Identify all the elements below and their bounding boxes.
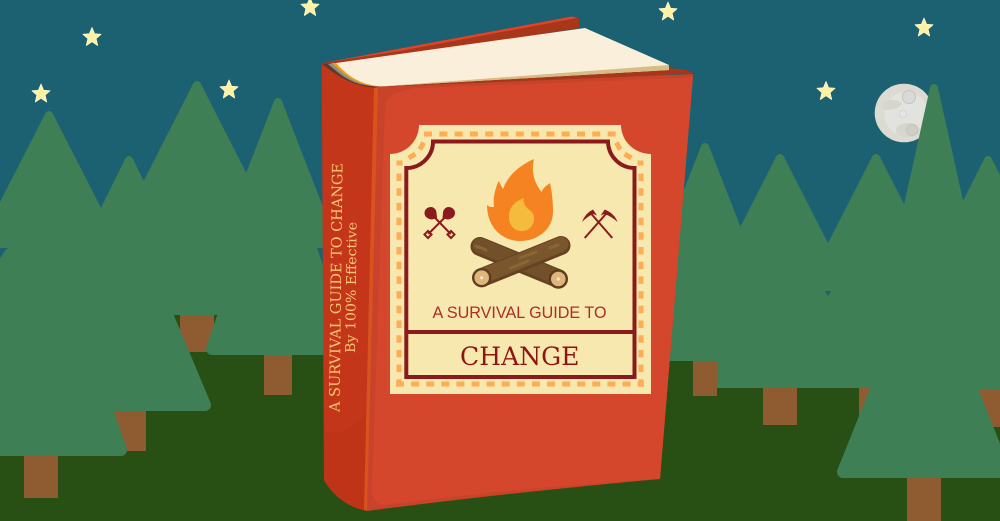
- maroon frame: [406, 142, 634, 377]
- icon: flame: [487, 159, 553, 241]
- left pine trees: [0, 85, 346, 450]
- right pine trees: [623, 88, 1000, 472]
- dashed border: [396, 134, 644, 388]
- tree trunks: [24, 310, 1000, 521]
- icon: crossed pickaxes: [582, 210, 618, 238]
- label text: change: CHANGE: [460, 342, 580, 372]
- book: [322, 16, 693, 511]
- back cover: [323, 16, 693, 92]
- icon: crossed logs: [472, 244, 568, 289]
- label text: a survival guide to: A SURVIVAL GUIDE TO: [432, 304, 606, 322]
- icon: crossed shovels: [424, 207, 455, 238]
- book label: [390, 125, 651, 394]
- front cover: [367, 74, 693, 511]
- pages: [322, 28, 669, 88]
- spine subtitle: By 100% Effective: [343, 222, 361, 353]
- moon: [875, 84, 933, 142]
- spine title: A SURVIVAL GUIDE TO CHANGE: [327, 163, 347, 413]
- stars: [32, 0, 933, 102]
- spine: [322, 63, 378, 511]
- ground: [0, 300, 1000, 521]
